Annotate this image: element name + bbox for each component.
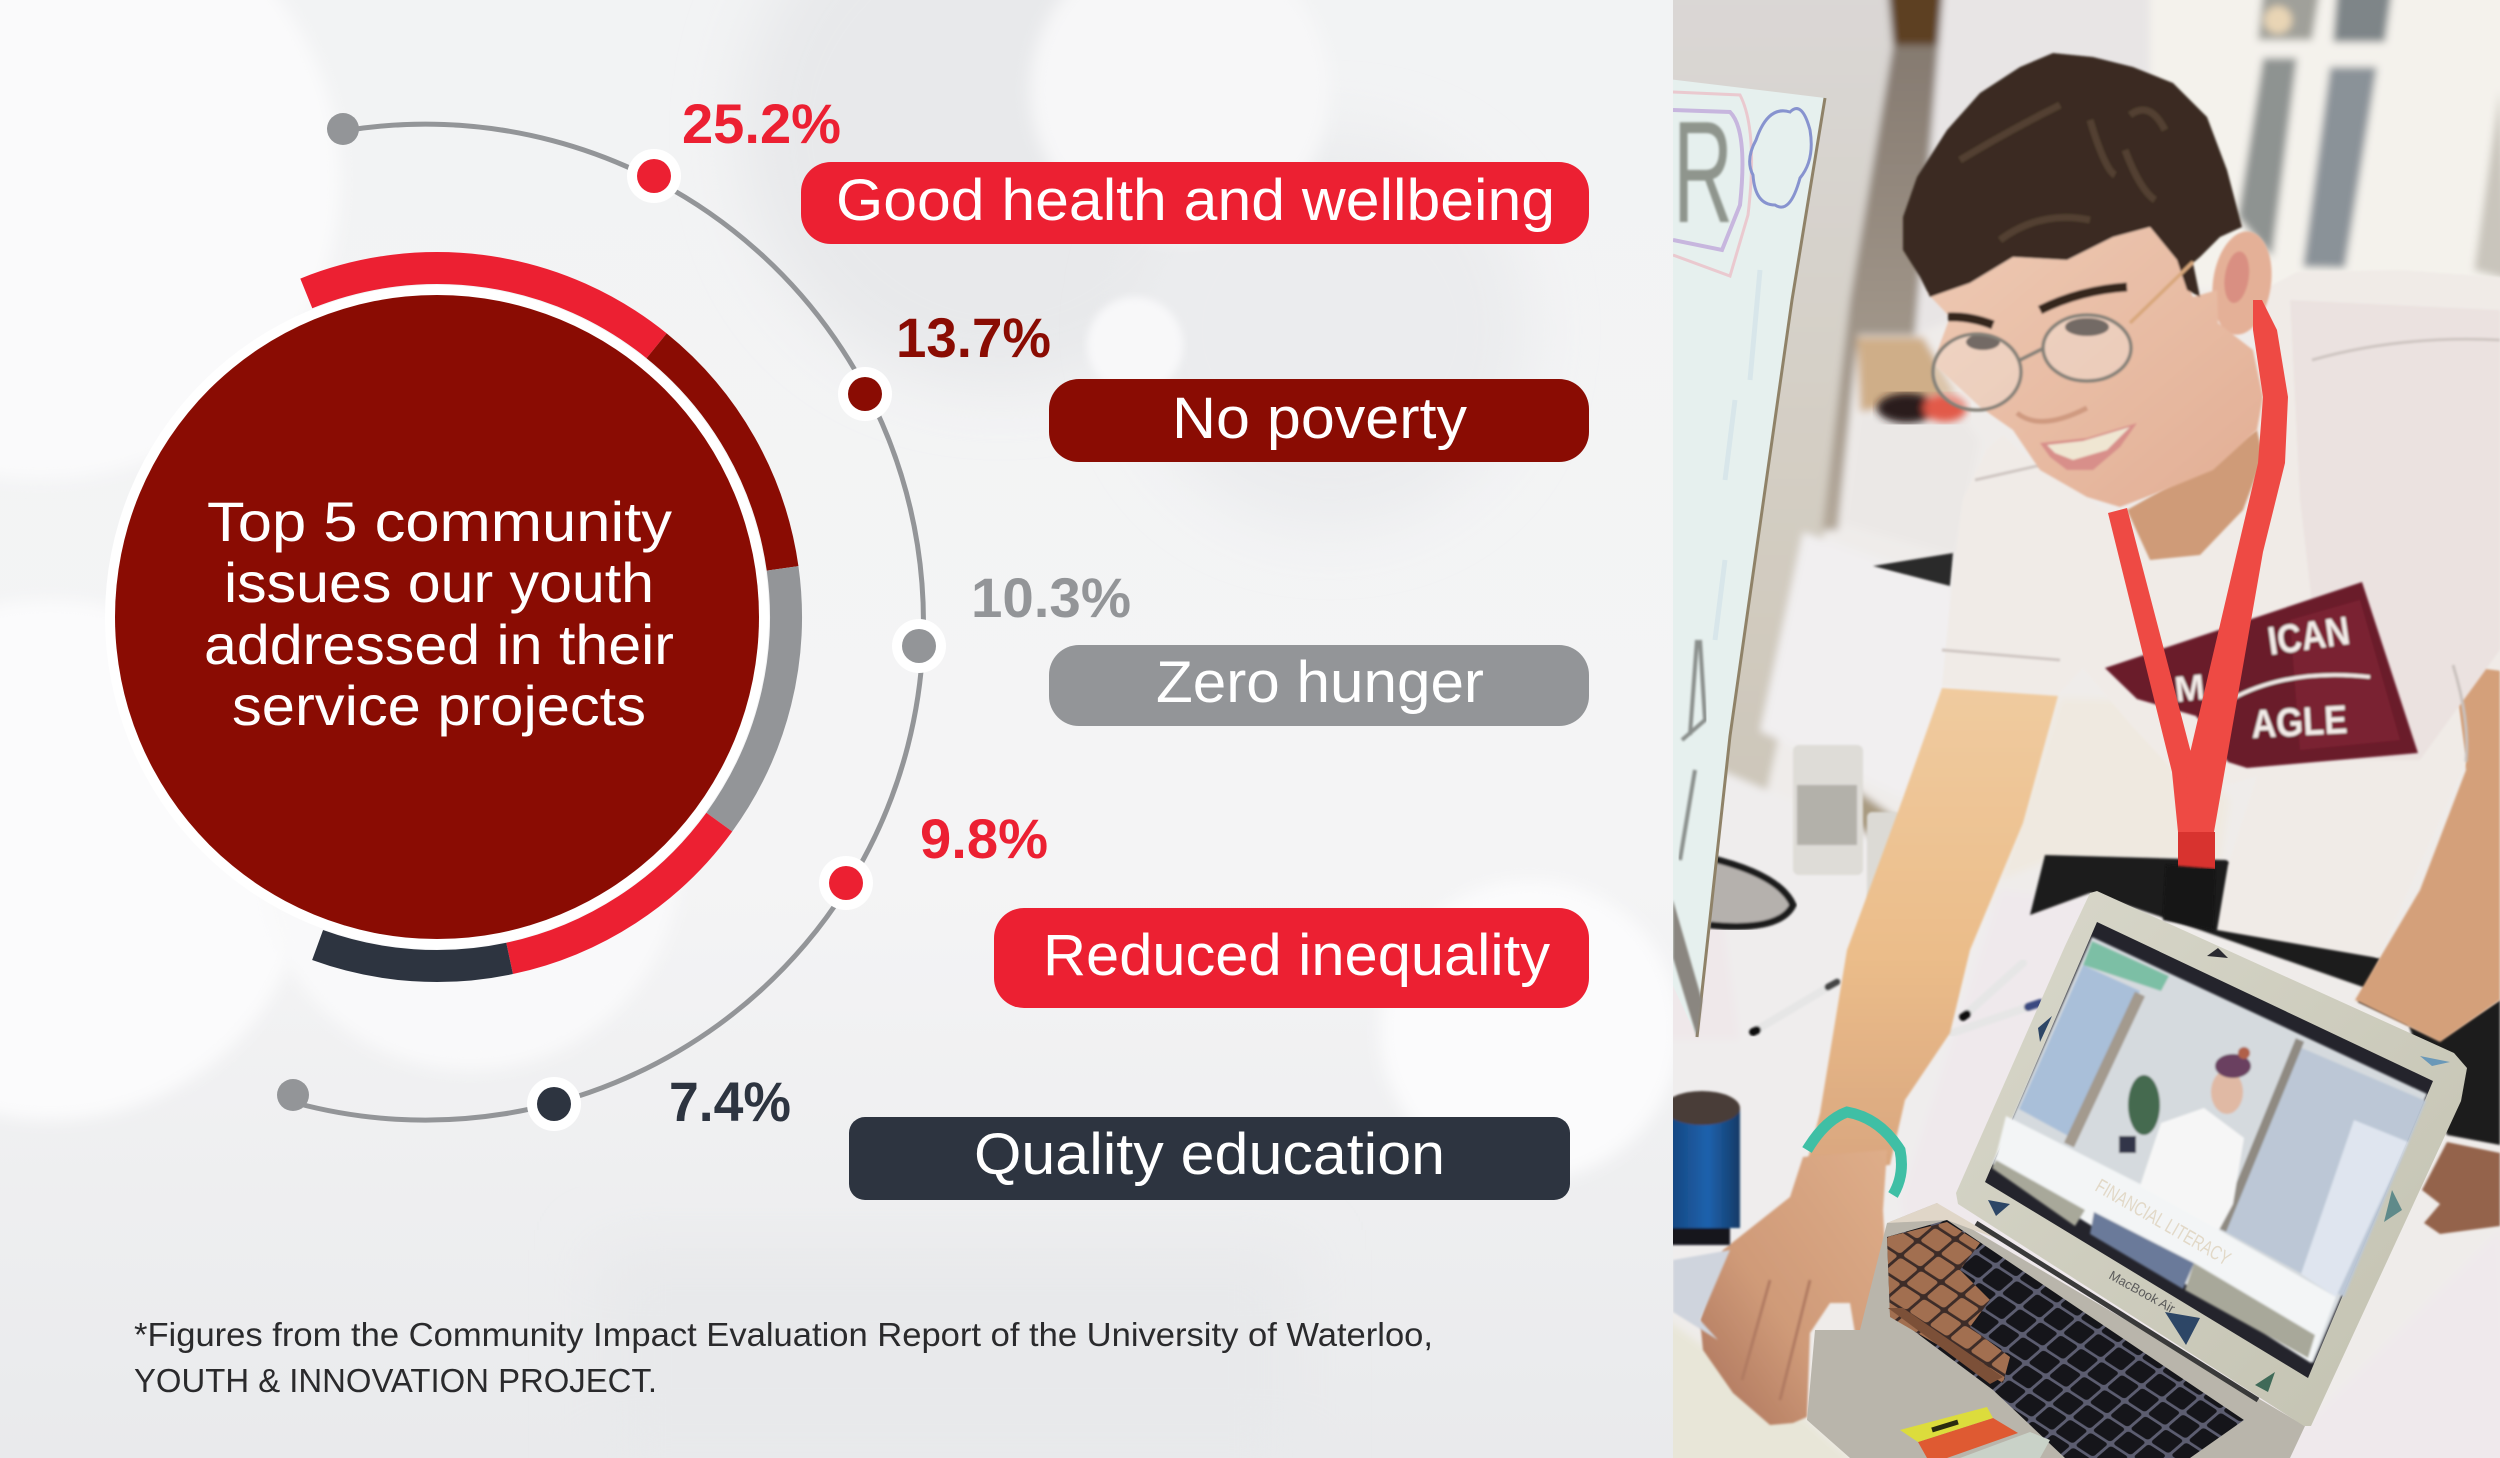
black cable <box>1710 858 1793 926</box>
head <box>1903 53 2278 507</box>
bezel <box>1985 922 2433 1378</box>
dark tablet <box>1873 553 1953 586</box>
blue speaker cup <box>1660 1091 1740 1245</box>
title text: addressed in their <box>204 613 674 676</box>
marker: reduced inequality <box>819 856 873 910</box>
poster board <box>1660 78 1825 1037</box>
model label: MacBook Air <box>2107 1268 2178 1316</box>
red lanyard <box>2108 300 2288 869</box>
pill: Good health and wellbeing: Good health and wellbeing <box>836 168 1555 233</box>
lanyard clip <box>2163 865 2215 930</box>
percent: 10.3%: 10.3% <box>971 566 1131 629</box>
hinge <box>1976 1223 2258 1400</box>
marker: no poverty <box>838 367 892 421</box>
center circle with title <box>105 285 769 949</box>
arc start dot <box>327 113 359 145</box>
arc end dot <box>277 1079 309 1111</box>
pill: Good health and wellbeing <box>801 162 1589 244</box>
pill: Zero hunger: Zero hunger <box>1156 650 1484 715</box>
wristband <box>1807 1112 1901 1195</box>
footnote: *Figures from the Community Impact Evaluation Report of the University of Waterloo, <box>134 1316 1433 1353</box>
photo backdrop <box>1660 0 2500 1458</box>
glasses on table <box>1793 745 1900 900</box>
percent: 7.4%: 7.4% <box>669 1070 791 1133</box>
title text: issues our youth <box>224 551 654 614</box>
hand on laptop <box>1700 1150 1895 1425</box>
sticker <box>1900 1407 2050 1458</box>
eyeglasses <box>1933 262 2193 410</box>
ring segment: zero hunger 10.3% <box>719 568 786 822</box>
pill: No poverty <box>1049 379 1589 462</box>
donut chart ring <box>306 268 786 966</box>
red and black object <box>1877 393 1967 423</box>
whale stickers <box>1988 948 2450 1392</box>
screen <box>1992 937 2427 1363</box>
laptop <box>1807 891 2467 1458</box>
palm rest highlight <box>1887 1203 2000 1240</box>
shirt logo: ICAN <box>2265 609 2352 664</box>
title text: Top 5 community <box>207 490 672 553</box>
ring segment: quality education 7.4% <box>318 945 510 966</box>
outer timeline arc <box>296 124 923 1120</box>
eyebrows <box>1948 287 2127 325</box>
smile <box>2040 423 2137 470</box>
title text: service projects <box>232 674 646 737</box>
left arm <box>1805 688 2058 1170</box>
neck <box>2127 430 2263 560</box>
ring segment: no poverty 13.7% <box>657 346 783 568</box>
photo: student at laptop <box>1660 0 2500 1458</box>
pens on table <box>1753 963 2040 1033</box>
nose shadow <box>2017 408 2087 421</box>
eyes <box>1966 318 2109 350</box>
right forearm <box>2355 655 2500 1042</box>
laptop lid <box>1956 891 2467 1426</box>
right hand <box>2422 1142 2500 1234</box>
pill: Quality education <box>849 1117 1570 1200</box>
dark clothing behind <box>2030 855 2500 1145</box>
marker: quality education <box>527 1077 581 1131</box>
percent: 25.2%: 25.2% <box>682 92 841 155</box>
laptop base <box>1807 1203 2305 1458</box>
t-shirt <box>1942 270 2500 958</box>
shirt logo <box>2105 582 2418 768</box>
pill: No poverty: No poverty <box>1172 386 1467 451</box>
pill: Reduced inequality <box>994 908 1589 1008</box>
hair <box>1903 53 2242 297</box>
panel: bokeh background <box>0 0 1680 1458</box>
pill: Zero hunger <box>1049 645 1589 726</box>
pill: Reduced inequality: Reduced inequality <box>1043 923 1550 988</box>
footnote: YOUTH & INNOVATION PROJECT. <box>134 1362 657 1399</box>
percent: 13.7%: 13.7% <box>896 306 1051 369</box>
marker: zero hunger <box>892 619 946 673</box>
hair highlights <box>1960 105 2165 240</box>
brown keys <box>1887 1222 2010 1383</box>
marker: good health <box>627 149 681 203</box>
shirt fold shading <box>2290 300 2500 760</box>
face <box>1927 227 2263 507</box>
sticker sheet on table <box>1673 1250 1730 1340</box>
title text <box>204 490 674 737</box>
screen caption: FINANCIAL LITERACY <box>2092 1175 2234 1270</box>
ring segment: good health 25.2% <box>306 268 657 346</box>
keyboard <box>1887 1220 2244 1458</box>
footnote <box>134 1316 1433 1399</box>
space bar <box>1888 1308 2003 1384</box>
shirt logo: M <box>2173 666 2207 710</box>
ear <box>2211 230 2273 336</box>
poster board: R <box>1673 91 1733 253</box>
ring segment: reduced inequality 9.8% <box>510 822 719 958</box>
percent: 9.8%: 9.8% <box>920 807 1048 870</box>
pill: Quality education: Quality education <box>974 1122 1445 1187</box>
shirt logo: AGLE <box>2250 698 2348 747</box>
